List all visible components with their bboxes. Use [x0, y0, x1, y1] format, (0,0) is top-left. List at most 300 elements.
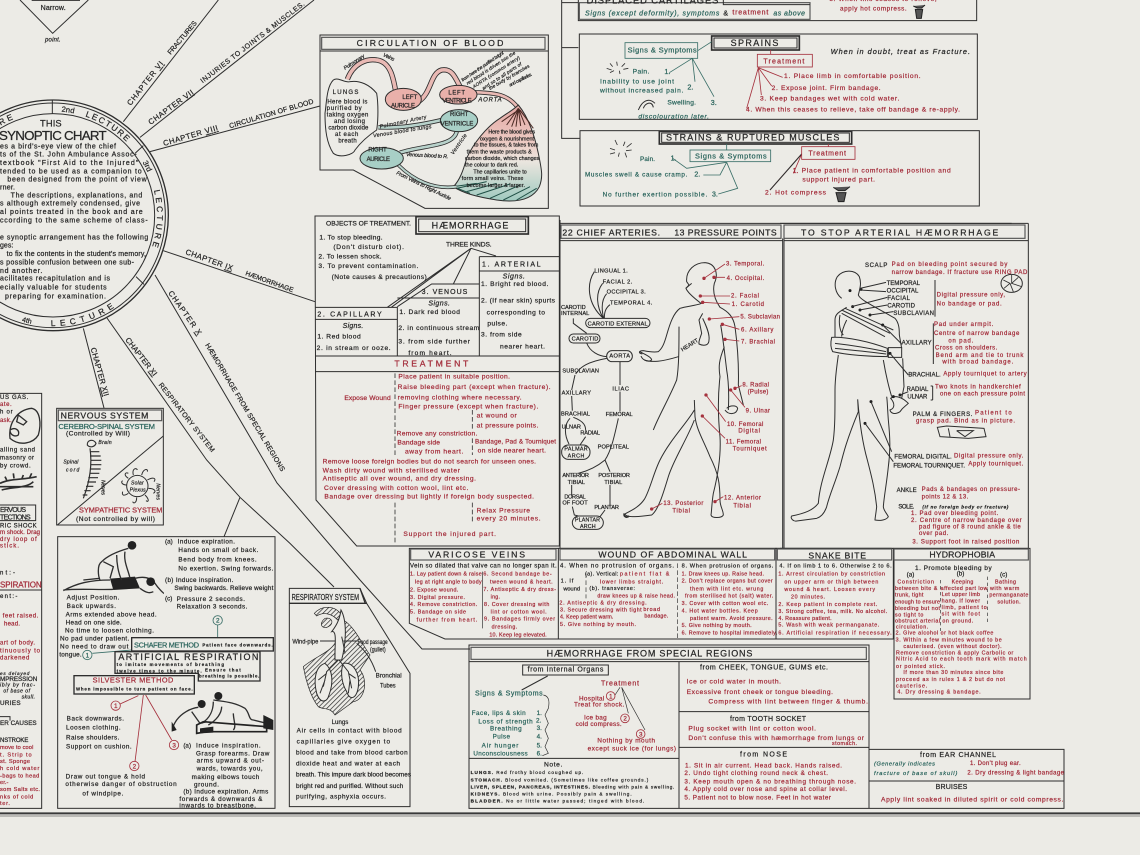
box: nervous affections: TECTIONS	[0, 514, 31, 521]
text: fainting and compression: head.	[4, 622, 20, 628]
icon: grasp pad	[937, 426, 986, 438]
markers: silvester steps: 1	[114, 703, 118, 710]
text: other causes and sunstroke: ER CAUSES	[0, 720, 37, 727]
diagram: pressure point markers and labels: 10. Femoral	[727, 422, 763, 428]
text: fainting and compression: art of body.	[0, 641, 35, 647]
text: other causes and sunstroke: st. Sponge	[0, 759, 30, 765]
panel: arterial: 1. ARTERIAL	[482, 262, 541, 269]
diagram: pressure point markers and labels: 3. Temporal.	[726, 262, 765, 268]
labels: arteries: TEMPORAL	[887, 281, 921, 287]
panel: ear channel and bruises: BRUISES	[936, 784, 968, 791]
text: fainting and compression: tinuously to	[0, 649, 41, 655]
heading: haemorrhage from special regions: HÆMORRHAGE FROM SPECIAL REGIONS	[547, 649, 752, 659]
panel: arterial: 2. (If near skin) spurts	[481, 298, 556, 305]
text block: treatment steps: Support the injured part.	[403, 531, 496, 538]
box: artificial respiration	[115, 652, 260, 681]
text block: varicose treatment: leg at right angle to body	[415, 579, 482, 585]
box: artificial respiration: twelve times to the minute.	[117, 668, 202, 673]
heading: to stop arterial haemorrhage: TO STOP ARTERIAL HÆMORRHAGE	[801, 228, 999, 238]
illustration: silvester method	[172, 692, 273, 733]
arrow: chapter VII injuries to joints and muscles	[140, 0, 314, 137]
text block: snake bite treatment: 20 minutes.	[791, 595, 825, 601]
text block: methods: 1. Pad over bleeding point.	[911, 511, 999, 517]
text block: methods: Bend arm and tie to trunk	[936, 353, 1024, 359]
text block: methods: Digital pressure only,	[937, 293, 1005, 299]
icon: solar plexus	[122, 469, 161, 503]
box: signs and symptoms	[673, 144, 771, 194]
text: gas: ate.	[0, 402, 12, 408]
diagram: lungs: LUNGS	[333, 90, 358, 96]
arrow: chapter VI fractures: CHAPTER VI	[125, 59, 165, 107]
text: electric shock: dry loop of	[0, 537, 37, 543]
text block: hydrophobia treatment: If more than 30 minutes since bite	[903, 670, 1003, 676]
ring labels: lectures: LECTURE	[152, 190, 163, 248]
capsule: aorta	[607, 351, 632, 362]
text: sprain signs	[599, 67, 717, 120]
box: treatment: Treatment	[808, 151, 846, 158]
arrow: chapter X haemorrhage from special regions: HÆMORRHAGE FROM SPECIAL REGIONS	[203, 342, 286, 473]
panel: artificial respiration	[58, 537, 275, 809]
labels: arteries: ANKLE	[897, 488, 917, 494]
text block: capillary explanation: the colour to dark red.	[465, 163, 518, 169]
panel: capillary: 1. Red blood	[317, 334, 361, 341]
panel: nose: 5. Patient not to blow nose. Feet in hot water	[684, 794, 831, 801]
text block: internal signs and symptoms: 4.	[537, 733, 542, 740]
text block: wound with protrusion of organs	[682, 563, 777, 637]
labels: arteries: OCCIPITAL	[887, 289, 919, 295]
panel: capillary	[317, 312, 391, 352]
text block: promote bleeding: (c)	[1000, 572, 1007, 579]
panel: cheek, tongue, gums: Compress with lint between finger & thumb.	[708, 698, 868, 705]
panel: arterial: nearer heart.	[500, 344, 545, 351]
panel: tooth socket: from TOOTH SOCKET	[730, 716, 807, 723]
text block: capillary explanation: carbon dioxide, which changes	[465, 156, 540, 162]
text block: silvester steps: ground.	[194, 781, 219, 788]
box: schafer method	[132, 638, 273, 651]
panel: nervous system	[57, 408, 163, 525]
text block: chart introduction: preparing for examination.	[5, 293, 106, 300]
text block: varicose treatment: 10. Keep leg elevated.	[489, 633, 547, 639]
text block: internal signs and symptoms: Pulse	[493, 734, 510, 741]
text block: treatment steps: Finger pressure (except when fracture).	[398, 404, 538, 411]
text block: snake bite treatment: on upper arm or thigh between	[784, 579, 878, 585]
text block: schafer steps: No time to loosen clothing.	[65, 628, 154, 635]
text block: schafer steps: Relaxation 3 seconds.	[177, 604, 248, 611]
text block: air cells explanation: capillaries give oxygen to	[297, 738, 390, 745]
text block: hydrophobia treatment: Nitric Acid to each tooth mark with match	[896, 657, 1027, 663]
capsule: palmar arch	[562, 445, 590, 459]
text block: promote bleeding	[907, 565, 1007, 631]
text: sprain signs: 1.	[664, 67, 670, 76]
markers: silvester steps	[111, 695, 179, 771]
text block: methods: Two knots in handkerchief	[935, 385, 1021, 391]
text block: note on organs	[471, 762, 674, 803]
panel: to stop arterial haemorrhage	[780, 223, 1028, 548]
box: signs and symptoms: Signs & Symptoms	[695, 152, 767, 161]
labels: arteries: SCALP	[865, 263, 887, 269]
heading: sprains	[712, 36, 799, 50]
text: gas: h or	[0, 410, 13, 416]
diagram: arterial tree: ANTERIOR	[562, 473, 589, 479]
box: artificial respiration: breathing is possible.	[199, 674, 259, 679]
text: electric shock: RIC SHOCK	[0, 523, 37, 529]
text block: methods: Cross on shoulders.	[935, 346, 998, 352]
diagram: arterial tree: OF FOOT	[562, 501, 588, 507]
text block: schafer steps: (c)	[165, 596, 172, 603]
arrow: chapter XI respiratory system: CHAPTER XI	[123, 336, 159, 378]
text block: hydrophobia treatment: solution.	[997, 599, 1021, 605]
icon: solar plexus: Plexus	[130, 487, 146, 493]
panel: snake bite: 4. If on limb 1 to 6. Otherwise 2 to 6.	[779, 564, 892, 570]
text: sprain treatment: 1. Place limb in comfortable position.	[784, 73, 921, 80]
box: from internal organs: from Internal Organs	[528, 667, 604, 674]
text: sympathetic system	[76, 505, 162, 523]
diagram: arterial tree: OCCIPITAL 3.	[607, 290, 646, 296]
text block: varicose treatment: 5. Bandage on side	[410, 609, 466, 615]
text block: silvester steps: otherwise danger of obstruction	[65, 781, 177, 788]
text block: note on organs: BLADDER. No or little water passed; tinged with blood.	[471, 798, 644, 803]
text: sympathetic system: SYMPATHETIC SYSTEM	[79, 505, 162, 514]
text: other causes and sunstroke: -bags to head	[0, 773, 39, 779]
labels: heart chambers and vessels: VENTRICLE	[442, 98, 472, 104]
text block: snake bite treatment: 3. Strong coffee, tea, milk. No alcohol.	[778, 609, 887, 615]
text block: internal treatment: except suck ice (for lungs)	[588, 745, 676, 752]
text block: treatment steps: Cover dressing with cotton wool, lint etc.	[324, 485, 468, 492]
text: sprain treatment: 4. When this ceases to relieve, take off bandage & re-apply.	[746, 107, 960, 114]
text block: no protrusion of organs: lower limbs straight.	[600, 580, 663, 586]
text: signs except deformity: Signs (except deformity), symptoms	[585, 11, 720, 18]
text block: capillary explanation: Here the blood gives	[488, 129, 535, 135]
heading: varicose veins: VARICOSE VEINS	[428, 550, 525, 560]
diagram: pressure point markers and labels: 11. Femoral	[726, 439, 761, 445]
panel: circulation of blood	[320, 35, 548, 208]
heading: circulation of blood: CIRCULATION OF BLOOD	[357, 38, 503, 48]
ring labels: lectures: 4th	[22, 317, 32, 324]
icon: ring pad	[1001, 274, 1022, 292]
text block: treatment steps: Bandage over dressing but lightly if foreign body suspected.	[324, 494, 534, 501]
text block: chart introduction: The descriptions, explanations, and	[11, 192, 142, 199]
text: other causes and sunstroke: er.-	[0, 780, 8, 786]
panel: ear channel and bruises: 1. Don't plug ear.	[970, 761, 1021, 767]
text: sprain signs: without increased pain.	[599, 88, 683, 95]
diagram: lungs: and losing	[334, 119, 365, 125]
text block: hydrophobia treatment: limb, patient to	[942, 605, 987, 611]
labels: heart chambers and vessels: AURICLE	[367, 157, 390, 163]
text: sprain signs: 2.	[687, 82, 693, 91]
text block: methods: Patient to	[975, 411, 1012, 417]
text block: schafer steps: Head on one side.	[66, 620, 122, 627]
text block: wound with protrusion of organs: them with lint etc. wrung	[690, 587, 763, 593]
text block: internal treatment: 2	[623, 716, 627, 723]
text block: schafer steps: Back upwards.	[67, 603, 116, 610]
text block: chart introduction	[0, 143, 148, 300]
text block: capillary explanation: form small veins. These	[462, 176, 523, 182]
panel: nose: 1. Sit in air current. Head back. Hands raised.	[685, 762, 842, 769]
text block: no protrusion of organs: draw knees up & raise head.	[597, 594, 675, 600]
text block: hydrophobia treatment: on ground.	[942, 618, 973, 624]
labels: heart chambers and vessels: Pulmonary	[343, 53, 366, 72]
diagram: pressure point markers and labels: 13. Posterior	[663, 501, 703, 507]
text: sprain signs: Pain.	[633, 69, 649, 76]
text block: treatment steps: at wound or	[477, 413, 517, 420]
text block: hydrophobia treatment: Constriction	[897, 579, 934, 585]
text block: methods: over pad.	[919, 531, 949, 537]
panel: hydrophobia	[894, 548, 1030, 699]
diagram: arterial tree: POPLITEAL	[598, 444, 629, 450]
arrow: chapter VIII circulation of blood: CIRCULATION OF BLOOD	[229, 98, 315, 130]
box: silvester method: When impossible to turn patient on face.	[76, 686, 193, 691]
capsule: palmar arch: PALMAR	[564, 447, 588, 453]
text block: schafer steps: (a)	[165, 538, 173, 545]
heading: chief arteries: 13 PRESSURE POINTS	[674, 228, 777, 238]
text block: varicose treatment: 9. Bandages firmly over	[484, 616, 555, 622]
ring labels: lectures	[0, 106, 163, 326]
text block: objects of treatment: 3. To prevent contamination.	[318, 263, 418, 270]
text block: chart introduction: ecially valuable for students	[0, 285, 107, 292]
panel: venous: Signs.	[428, 300, 450, 307]
box: nervous affections: ERVOUS	[0, 507, 26, 514]
labels: arteries: SOLE.	[898, 505, 915, 511]
panel: capillary: Signs.	[343, 323, 363, 330]
capsule: plantar arch: ARCH	[580, 524, 596, 530]
heading: this synoptic chart: THIS	[40, 119, 62, 129]
text block: from here the purified blood: the body by branches	[488, 63, 531, 91]
text block: internal treatment: Treatment	[601, 680, 639, 687]
text: strain signs: Muscles swell & cause cramp.	[585, 172, 688, 179]
text block: chart introduction: e synoptic arrangement has the following	[0, 234, 148, 241]
text block: no protrusion of organs: (b). transverse:	[589, 586, 635, 592]
text block: chart introduction: to fix the contents in the student's memory,	[7, 251, 146, 258]
text: sprain signs: Inability to use joint	[600, 79, 674, 86]
diagram: pressure point markers and labels: 1. Carotid	[732, 302, 764, 308]
text block: internal signs and symptoms: 2.	[536, 718, 542, 725]
arrow: chapter IX haemorrhage: CHAPTER IX	[184, 247, 234, 273]
labels: heart chambers and vessels: VENTRICLE	[441, 122, 473, 128]
text block: silvester steps: Grasp forearms. Draw	[196, 750, 270, 757]
capsule: palmar arch: ARCH	[568, 453, 584, 459]
text: signs except deformity: as above	[773, 11, 805, 18]
labels: heart chambers and vessels: RIGHT	[450, 112, 469, 118]
diagram: arterial tree: PLANTAR	[594, 505, 619, 511]
diagram: arterial tree: CAROTID	[561, 305, 586, 311]
panel: arterial: pulse.	[487, 320, 507, 327]
box: artificial respiration: Ensure that	[205, 668, 241, 673]
text block: chart introduction: s possible confusion between one sub-	[0, 260, 135, 267]
arrow: chapter VII injuries to joints and muscles: INJURIES TO JOINTS & MUSCLES.	[200, 1, 306, 85]
text block: note on organs: KIDNEYS. Blood with urine. Possibly pain & swelling.	[471, 792, 632, 797]
panel: nose: from NOSE	[740, 752, 787, 759]
panel: varicose veins	[409, 548, 558, 639]
diagram: arterial tree: FACIAL 2.	[603, 279, 633, 285]
text block: hydrophobia treatment: obstruct arterial	[895, 618, 940, 624]
text block: silvester steps: Induce inspiration.	[196, 742, 261, 749]
labels: arteries: SUBCLAVIAN	[893, 311, 934, 317]
text: strain signs: 3.	[712, 191, 718, 198]
text: gas: masonry or	[0, 455, 34, 461]
text block: capillary explanation: become larger & larger.	[467, 183, 525, 189]
capsule: carotid: CAROTID	[572, 336, 598, 342]
illustration: standing body in profile	[624, 263, 743, 518]
labels: respiratory anatomy: Food passage	[358, 639, 388, 646]
panel: nose: 3. Keep mouth open & no breathing through nose.	[684, 779, 856, 786]
box: signs and symptoms: Signs & Symptoms	[628, 46, 697, 55]
labels: heart chambers and vessels: LEFT	[402, 95, 418, 101]
text block: internal treatment	[574, 680, 676, 752]
text: cerebro-spinal system: CEREBRO-SPINAL SYSTEM	[58, 422, 155, 431]
text block: schafer steps: Hands on small of back.	[178, 547, 259, 554]
labels: arteries: BRACHIAL.	[908, 373, 941, 379]
text: fainting and compression: ibly by frac-	[0, 683, 35, 689]
labels: heart chambers and vessels: RIGHT	[368, 148, 387, 154]
text: electric shock	[0, 523, 42, 600]
lines: three kinds connectors and table grid	[315, 248, 560, 372]
panel: arterial: 1. Bright red blood.	[481, 281, 548, 288]
text block: schafer steps: Pressure 2 seconds.	[177, 596, 245, 603]
labels: arteries: PALM & FINGERS.	[913, 412, 973, 418]
text block: internal treatment: Treat for shock.	[574, 702, 625, 709]
text: gas: US GAS.	[0, 395, 29, 401]
diagram: arterial tree: DORSAL	[564, 495, 586, 501]
illustration: schafer method	[63, 541, 164, 593]
text: electric shock: SPIRATION	[0, 580, 42, 589]
labels: heart chambers and vessels: LEFT	[448, 90, 465, 96]
text block: no protrusion of organs: patient flat &	[620, 572, 670, 578]
text block: methods: pad figure of 8 round ankle & tie	[919, 525, 1021, 531]
labels: arteries: FEMORAL TOURNIQUET.	[893, 463, 965, 469]
text block: treatment steps: at pressure points.	[477, 423, 538, 430]
diagram: pressure point markers and labels: 2. Facial	[731, 294, 759, 300]
text block: methods: Pads & bandages on pressure-	[922, 487, 1020, 493]
text block: methods: Digital pressure only.	[954, 453, 1024, 459]
box: nervous affections	[0, 505, 36, 521]
capsule: aorta: AORTA	[609, 354, 630, 360]
text block: silvester steps: Back downwards.	[67, 715, 124, 722]
text: electric shock: nt:-	[0, 570, 15, 576]
diagram: narrow point triangle: Narrow.	[41, 5, 66, 12]
text: strain treatment	[765, 168, 951, 196]
footer: chart bottom border	[0, 813, 1140, 816]
text block: objects of treatment: (Don't disturb clot).	[333, 244, 404, 251]
text block: chart introduction: ts of the St. John Ambulance Assoc-	[0, 152, 137, 159]
text block: varicose treatment: tween wound & heart.	[490, 580, 553, 586]
heading: hydrophobia	[894, 549, 1028, 560]
text block: methods: with broad bandage.	[941, 360, 1014, 366]
icon: pain	[607, 62, 628, 74]
text block: silvester steps: (a)	[183, 742, 191, 749]
diagram: arterial tree: AXILLARY	[562, 390, 591, 396]
panel: ear channel and bruises	[874, 752, 1065, 803]
box: treatment	[747, 50, 812, 108]
text block: hydrophobia treatment: Keeping	[952, 579, 973, 585]
labels: respiratory anatomy: Lungs	[332, 719, 349, 726]
text block: objects of treatment: THREE KINDS.	[446, 242, 492, 249]
icon: solar plexus: Nerves	[155, 483, 161, 500]
diagram: capillary network	[453, 105, 542, 201]
heading: varicose veins	[411, 549, 556, 560]
diagram: pressure point markers and labels: 8. Radial	[742, 383, 769, 389]
labels: heart chambers and vessels: From Veins to Right Auricle	[395, 170, 452, 202]
text block: internal treatment: Nothing by mouth	[597, 738, 655, 745]
text block: schafer steps: tongue.	[59, 652, 82, 659]
diagram: pressure point markers and labels: 7. Brachial	[741, 340, 775, 346]
text block: treatment steps: Bandage, Pad & Tourniquet	[475, 439, 556, 446]
labels: respiratory anatomy	[292, 638, 402, 726]
text block: varicose treatment: further from heart.	[417, 617, 477, 623]
panel: ear channel and bruises: Apply lint soaked in diluted spirit or cold compress.	[881, 796, 1063, 803]
diagram: narrow point triangle	[20, 0, 88, 44]
text: gas: by crowd.	[0, 463, 31, 469]
text block: schafer steps: No exertion. Swing forwards.	[178, 566, 274, 573]
icon: swelling	[638, 100, 655, 110]
text block: wound with protrusion of organs: patient warm. Avoid pressure.	[690, 616, 773, 622]
arrow: chapter VI fractures: FRACTURES	[167, 20, 199, 56]
text: gas	[0, 395, 35, 469]
illustration: standing body in profile: HEART	[680, 338, 700, 353]
text block: methods: No bandage or pad.	[937, 301, 1002, 307]
panel: ear channel and bruises: (Generally indicates	[874, 761, 935, 767]
illustration: bandaged body	[791, 271, 935, 521]
capsule: plantar arch: PLANTAR	[575, 518, 600, 524]
illustration: lungs and airway	[303, 607, 376, 715]
text: strain treatment: 1.	[793, 168, 799, 175]
text block: chart introduction: tended to be used as a companion to	[0, 168, 142, 175]
text block: treatment steps: every 20 minutes.	[477, 516, 541, 523]
text block: hydrophobia treatment: so tight to	[895, 613, 923, 619]
text: strain signs: 2.	[694, 171, 700, 178]
panel: venous: 3. VENOUS	[422, 289, 468, 296]
text block: note on organs: STOMACH. Blood vomited. (Sometimes like coffee grounds.)	[471, 777, 649, 782]
labels: respiratory anatomy: Tubes	[380, 682, 396, 689]
ring labels: lectures: LECTURE	[86, 111, 130, 142]
labels: heart chambers and vessels: Ventricle	[450, 133, 469, 156]
text block: hydrophobia treatment: Let upper limb	[942, 592, 980, 598]
text block: internal signs and symptoms: Air hunger	[482, 742, 518, 749]
heading: haemorrhage: HÆMORRHAGE	[432, 220, 508, 230]
text: other causes and sunstroke: nks of cold	[0, 794, 33, 800]
capsule: carotid	[569, 334, 600, 343]
text block: treatment steps: Expose Wound	[344, 395, 391, 402]
diagram: arterial tree: POSTERIOR	[598, 473, 630, 479]
text block: hydrophobia treatment: circulation.	[896, 625, 928, 631]
text block: methods: on pad.	[948, 339, 974, 345]
box: treatment	[770, 144, 855, 190]
text: other causes and sunstroke: move to cool	[0, 745, 33, 751]
text: cerebro-spinal system	[58, 422, 155, 496]
heading: strains and ruptured muscles: STRAINS & RUPTURED MUSCLES	[666, 133, 839, 143]
text: fainting and compression: of base of	[3, 689, 31, 695]
panel: ear channel and bruises: fracture of base of skull)	[874, 771, 957, 777]
text: strain treatment: support injured part.	[802, 177, 875, 184]
labels: heart chambers and vessels: Pulmonary Artery	[379, 114, 427, 130]
heading: wound of abdominal wall	[560, 549, 775, 560]
capsule: carotid external	[586, 318, 650, 328]
text block: silvester steps: forwards & downwards &	[179, 796, 263, 803]
heading: chief arteries	[561, 225, 781, 238]
text block: schafer steps: Bend body from knees.	[178, 557, 257, 564]
icon: solar plexus: Solar	[131, 481, 144, 487]
text: signs except deformity: &	[723, 11, 728, 18]
labels: arteries: FEMORAL DIGITAL.	[894, 455, 952, 461]
text: fainting and compression: MPRESSION	[0, 676, 38, 683]
text block: hydrophobia treatment: permanganate	[989, 593, 1028, 599]
icon: debris	[0, 473, 37, 490]
text block: hydrophobia treatment: bleeding but not	[895, 606, 941, 612]
box: signs and symptoms	[625, 42, 714, 97]
box: treatment: Treatment	[763, 58, 804, 65]
text block: treatment steps: Raise bleeding part (except when fracture).	[398, 384, 551, 391]
text block: schafer steps: Adjust Position.	[67, 594, 120, 601]
diagram: pressure point markers and labels: 9. Ulnar	[746, 408, 770, 414]
